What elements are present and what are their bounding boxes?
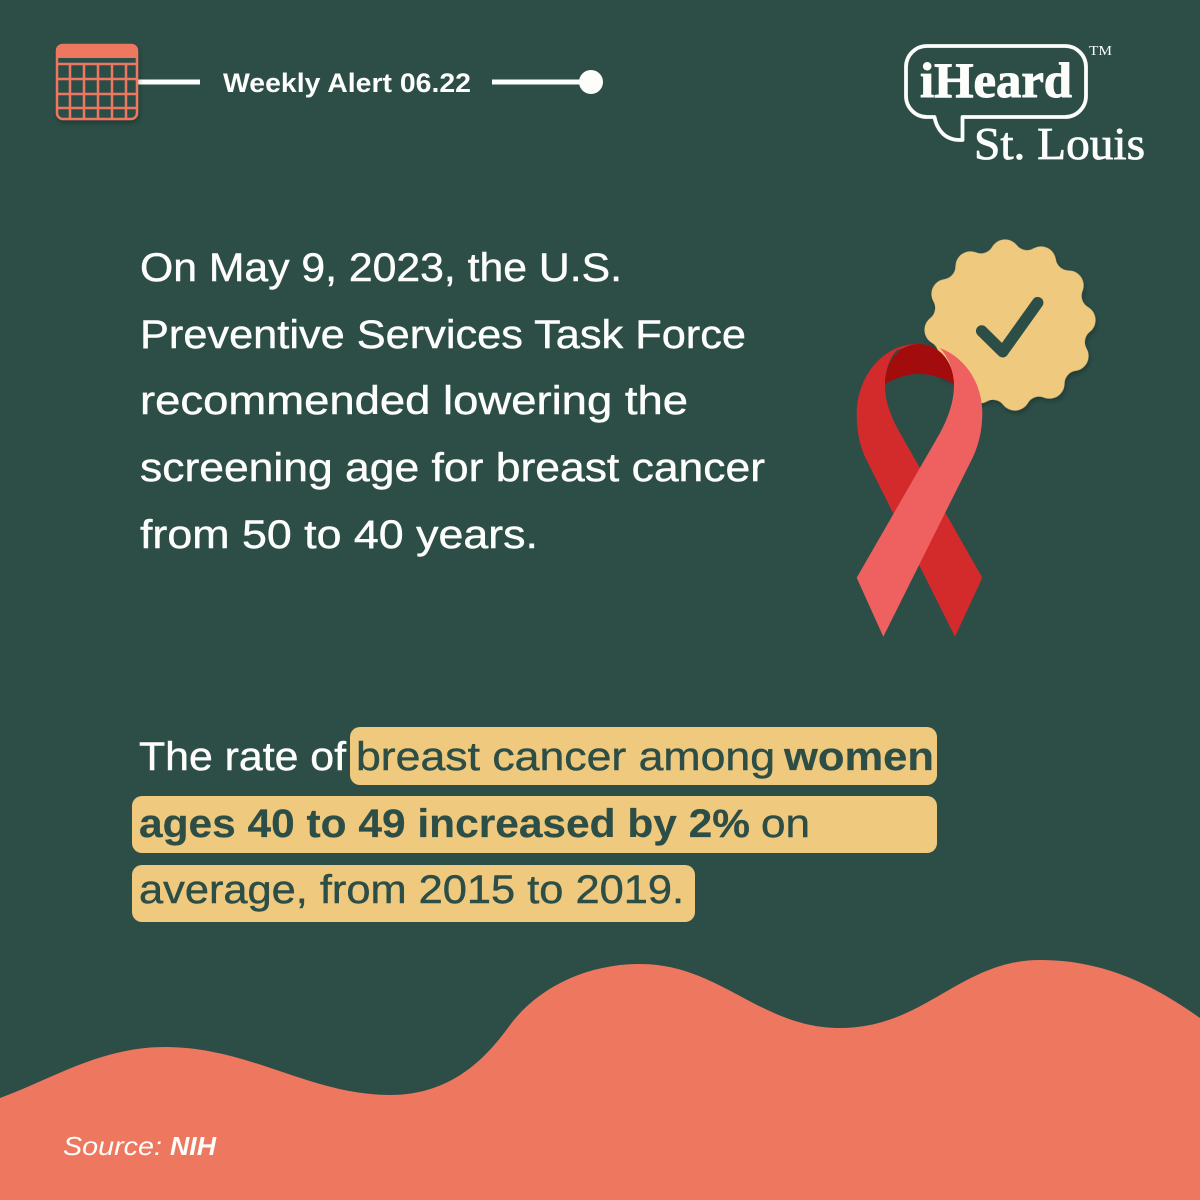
badge shape	[919, 234, 1101, 416]
decorative coral wave footer	[0, 960, 1200, 1200]
icon: calendar	[56, 44, 138, 119]
trademark: TM	[1089, 44, 1113, 59]
source credit: Source:	[63, 1131, 162, 1161]
highlight boxes	[132, 727, 937, 922]
logo: iHeard St. Louis	[906, 44, 1145, 169]
statistic text: ages 40 to 49 increased by 2%	[139, 802, 750, 846]
statistic text: average, from 2015 to 2019.	[139, 868, 684, 912]
speech bubble outline	[906, 46, 1086, 140]
connector line left	[136, 80, 200, 84]
statistic text: women	[783, 735, 934, 779]
icon: verified badge with check	[919, 234, 1101, 416]
check mark	[982, 303, 1038, 352]
statistic text: The rate of	[139, 735, 347, 779]
text block: USPSTF recommendation: screening age for breast cancer	[140, 446, 765, 490]
connector line with dot	[492, 70, 603, 94]
text block: USPSTF recommendation: recommended lowering the	[140, 379, 688, 423]
text block: USPSTF recommendation: from 50 to 40 years.	[140, 513, 538, 557]
source credit: NIH	[170, 1131, 217, 1161]
source credit	[63, 1131, 217, 1161]
logo wordmark: iHeard	[920, 52, 1072, 108]
statistic text: breast cancer among	[356, 735, 775, 779]
icon: awareness ribbon	[857, 344, 982, 637]
text block: USPSTF recommendation: Preventive Services Task Force	[140, 313, 746, 357]
statistic text: on	[761, 802, 810, 846]
ribbon front band	[857, 348, 982, 637]
text block: USPSTF recommendation	[140, 246, 765, 557]
text block: USPSTF recommendation: On May 9, 2023, the U.S.	[140, 246, 622, 290]
ribbon back band	[857, 344, 982, 637]
text block: breast cancer rate	[132, 727, 937, 922]
header: weekly alert bar	[56, 44, 603, 119]
logo location: St. Louis	[974, 118, 1145, 169]
header label: Weekly Alert 06.22	[223, 68, 471, 98]
statistic text	[139, 735, 934, 912]
ribbon inner fold	[885, 344, 954, 384]
